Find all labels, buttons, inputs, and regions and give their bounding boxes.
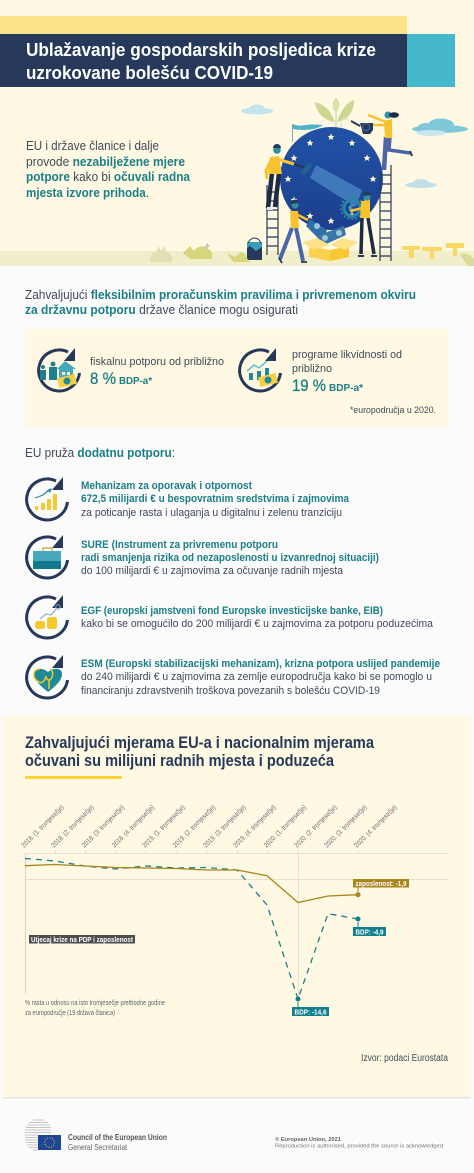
intro text: potpore kako bi očuvali radna (26, 169, 191, 184)
text: SURE: SURE (Instrument za privremenu potporu (81, 539, 278, 551)
quarter labels: 2018. (4. tromjesečje) (111, 804, 156, 849)
text: SURE (81, 539, 379, 577)
quarter labels: 2020. (2. tromjesečje) (293, 804, 339, 849)
paint can (247, 238, 262, 260)
text: ESM: do 240 milijardi € u zajmovima za zemlje europodručja kako bi se pomoglo u (81, 671, 432, 683)
illustration: EU globe with workers (150, 97, 474, 266)
text: recovery mechanism: za poticanje rasta i ulaganja u digitalnu i zelenu tranziciju (81, 507, 342, 519)
line chart (20, 804, 448, 1017)
intro text: EU i države članice i dalje (26, 138, 159, 153)
intro text (26, 138, 191, 200)
quarter labels: 2018. (2. tromjesečje) (50, 804, 96, 849)
employment line (25, 864, 358, 902)
title banner (0, 16, 455, 87)
icon: coins (27, 595, 68, 638)
chart note: % rasta u odnosu na isto tromjesečje prethodne godine (25, 998, 165, 1007)
text: recovery mechanism: Mehanizam za oporavak i otpornost (81, 480, 252, 492)
text: liquidity (292, 349, 402, 395)
copyright (275, 1136, 443, 1150)
item: ESM (27, 655, 440, 698)
globe (280, 127, 383, 230)
worker with roller (266, 144, 294, 210)
quarter labels: 2019. (2. tromjesečje) (172, 804, 217, 849)
copyright: Reproduction is authorised, provided the source is acknowledged (275, 1144, 443, 1150)
GDP dashed line (25, 858, 358, 999)
icon: heart and stethoscope (27, 655, 68, 698)
paint stripe and roller (294, 164, 362, 207)
grid (25, 850, 448, 1000)
right ladder (380, 165, 391, 261)
right yellow crates (402, 243, 464, 259)
cogs (306, 219, 346, 245)
left ladder (267, 185, 278, 255)
quarter labels (20, 804, 399, 849)
title banner: uzrokovane bolešću COVID-19 (26, 63, 273, 83)
label: employment (353, 879, 409, 892)
label: GDP -4.9: BDP: -4,9 (356, 927, 384, 936)
data points (296, 892, 360, 1002)
open box (302, 238, 358, 261)
source: Izvor: podaci Eurostata (361, 1053, 448, 1064)
intro sentence: flexible rules: Zahvaljujući fleksibilnim proračunskim pravilima i privremenom okviru (25, 287, 416, 302)
icon: growth bars (27, 477, 68, 520)
label: chart title: Utjecaj krize na PDP i zaposlenost (31, 935, 133, 944)
logo: Council of the EU: General Secretariat (68, 1143, 128, 1152)
panel: jobs chart section (3, 716, 471, 1098)
text: fiscal support: 8 % (90, 369, 116, 388)
icon: liquidity chart (240, 348, 280, 391)
icon: briefcase (27, 535, 68, 578)
heading: jobs preserved (25, 734, 375, 779)
label: employment: zaposlenost: -1,9 (356, 879, 406, 888)
quarter labels: 2020. (1. tromjesečje) (263, 804, 308, 849)
item: recovery mechanism (27, 477, 350, 520)
clouds (241, 104, 468, 188)
intro sentence: flexible rules: za državnu potporu države članice mogu osigurati (25, 302, 298, 317)
label: GDP -4.9 (353, 922, 386, 936)
text: EGF (81, 605, 433, 630)
intro sentence: flexible rules (25, 287, 416, 317)
heading: jobs preserved: Zahvaljujući mjerama EU-a i nacionalnim mjerama (25, 734, 375, 752)
quarter labels: 2019. (3. tromjesečje) (202, 804, 248, 849)
text: liquidity: približno (292, 363, 332, 375)
quarter labels: 2018. (1. tromjesečje) (20, 804, 66, 849)
text: liquidity: programe likvidnosti od (292, 349, 402, 361)
text: recovery mechanism (81, 480, 350, 519)
logo: Council of the EU: Council of the European Union (68, 1133, 167, 1142)
stars (284, 133, 376, 224)
top cream background (0, 0, 474, 266)
quarter labels: 2019. (4. tromjesečje) (232, 804, 278, 849)
worker woman (279, 199, 308, 263)
logo: Council of the EU (25, 1120, 167, 1152)
intro text: provode nezabilježene mjere (26, 154, 185, 169)
text: fiscal support: BDP-a* (119, 375, 153, 387)
item: EGF (27, 595, 433, 638)
plant (315, 97, 354, 137)
text: EGF: kako bi se omogućilo do 200 milijardi € u zajmovima za potporu poduzećima (81, 618, 433, 630)
icon: fiscal support house (39, 348, 80, 391)
worker with gear (341, 191, 377, 256)
text: fiscal support (90, 356, 224, 388)
title banner: Ublažavanje gospodarskih posljedica krize (26, 40, 376, 60)
quarter labels: 2020. (3. tromjesečje) (323, 804, 369, 849)
ground plants (150, 243, 474, 266)
text: fiscal support: fiskalnu potporu od približno (90, 356, 224, 368)
chart note (25, 998, 165, 1017)
text: ESM: ESM (Europski stabilizacijski mehanizam), krizna potpora uslijed pandemije (81, 658, 440, 670)
label: GDP -14.6 (292, 1002, 329, 1016)
copyright: © European Union, 2021 (275, 1136, 341, 1143)
quarter labels: 2020. (4. tromjesečje) (353, 804, 399, 849)
item: SURE (27, 535, 379, 578)
text: EGF: EGF (europski jamstveni fond Europske investicijske banke, EIB) (81, 605, 383, 617)
ground band (0, 251, 474, 266)
flag (292, 124, 323, 142)
chart note: za europodručje (19 država članica) (25, 1008, 115, 1017)
quarter labels: 2019. (1. tromjesečje) (141, 804, 187, 849)
text: recovery mechanism: 672,5 milijardi € u bespovratnim sredstvima i zajmovima (81, 493, 350, 505)
text: liquidity: 19 % (292, 376, 326, 395)
text: ESM (81, 658, 440, 697)
worker with watering can (341, 112, 412, 170)
footnote: *europodručja u 2020. (350, 405, 436, 415)
heading: jobs preserved: očuvani su milijuni radnih mjesta i poduzeća (25, 752, 335, 770)
text: liquidity: BDP-a* (329, 382, 364, 394)
panel: national support (25, 329, 448, 427)
heading: additional support: EU pruža dodatnu potporu: (25, 445, 175, 460)
text: SURE: do 100 milijardi € u zajmovima za očuvanje radnih mjesta (81, 565, 343, 577)
quarter labels: 2018. (3. tromjesečje) (81, 804, 126, 849)
text: ESM: financiranju zdravstvenih troškova povezanih s bolešću COVID-19 (81, 685, 380, 697)
intro text: mjesta izvore prihoda. (26, 185, 149, 200)
worker with gear: € (348, 203, 355, 215)
label: GDP -14.6: BDP: -14,6 (294, 1007, 326, 1016)
text: SURE: radi smanjenja rizika od nezaposlenosti u izvanrednoj situaciji) (81, 552, 379, 564)
